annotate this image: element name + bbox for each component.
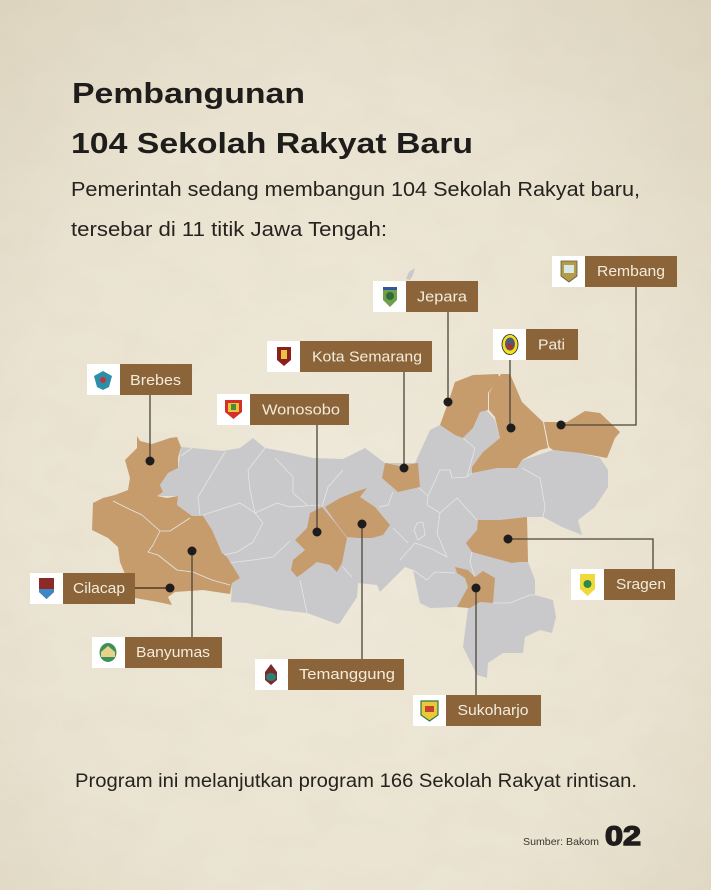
icon: Jepara emblem <box>383 287 397 307</box>
highlighted: Brebes, Cilacap, Banyumas <box>92 436 240 605</box>
callout: Sragen: Sragen <box>616 576 666 593</box>
callout: Cilacap <box>30 573 174 604</box>
callout: Brebes <box>87 364 192 466</box>
callout: Sukoharjo <box>413 584 541 726</box>
highlighted: Rembang <box>544 411 620 458</box>
callout: Cilacap: Cilacap <box>73 580 125 597</box>
callout: Sragen <box>504 534 675 600</box>
icon: Pati emblem <box>502 334 518 354</box>
icon: Sukoharjo emblem <box>421 701 438 721</box>
callout: Kota Semarang <box>267 341 432 472</box>
callout: Banyumas <box>92 546 222 668</box>
callout: Brebes: Brebes <box>130 372 181 389</box>
callout: Rembang: Rembang <box>597 263 665 280</box>
highlighted: Pati <box>472 374 548 473</box>
highlighted: Wonosobo <box>291 507 347 577</box>
highlighted: Sragen <box>466 517 528 563</box>
callout: Jepara <box>373 281 478 406</box>
icon: Banyumas emblem <box>100 643 116 662</box>
callout: Kota Semarang: Kota Semarang <box>312 348 422 366</box>
callout: Jepara: Jepara <box>417 288 468 306</box>
title <box>71 78 473 160</box>
callout: Temanggung <box>255 520 404 690</box>
title: Pembangunan <box>72 78 305 110</box>
callout: Banyumas: Banyumas <box>136 644 210 661</box>
callout: Pati <box>493 329 578 432</box>
highlighted: Sukoharjo <box>455 567 495 608</box>
subtitle: tersebar di 11 titik Jawa Tengah: <box>71 219 387 241</box>
callout: Sukoharjo: Sukoharjo <box>458 702 528 719</box>
title: 104 Sekolah Rakyat Baru <box>71 128 473 160</box>
icon: Cilacap emblem <box>39 578 54 599</box>
callout: Temanggung: Temanggung <box>299 666 395 683</box>
icon: Sragen emblem <box>580 574 595 596</box>
highlighted: Temanggung <box>325 488 390 538</box>
callout: Rembang <box>552 256 677 430</box>
highlighted: Jepara <box>440 374 500 438</box>
callout: Pati: Pati <box>538 336 565 354</box>
closing statement: Program ini melanjutkan program 166 Sekolah Rakyat rintisan. <box>75 771 637 792</box>
subtitle <box>71 179 640 241</box>
subtitle: Pemerintah sedang membangun 104 Sekolah Rakyat baru, <box>71 179 640 201</box>
icon: Semarang emblem <box>277 347 291 366</box>
icon: Wonosobo emblem <box>225 400 242 419</box>
page number: 02 <box>605 821 641 851</box>
highlighted: Kota Semarang <box>382 463 420 492</box>
icon: Rembang emblem <box>561 261 577 282</box>
map: Central Java regencies <box>92 268 620 678</box>
icon: Brebes emblem <box>94 371 112 390</box>
gray regencies <box>157 408 608 678</box>
callout: Wonosobo <box>217 394 349 536</box>
Karimunjawa island <box>406 268 415 280</box>
callout: Wonosobo: Wonosobo <box>262 402 340 418</box>
icon: Temanggung emblem <box>265 664 277 685</box>
source credit: Sumber: Bakom <box>523 836 599 848</box>
gray borders <box>181 438 545 613</box>
